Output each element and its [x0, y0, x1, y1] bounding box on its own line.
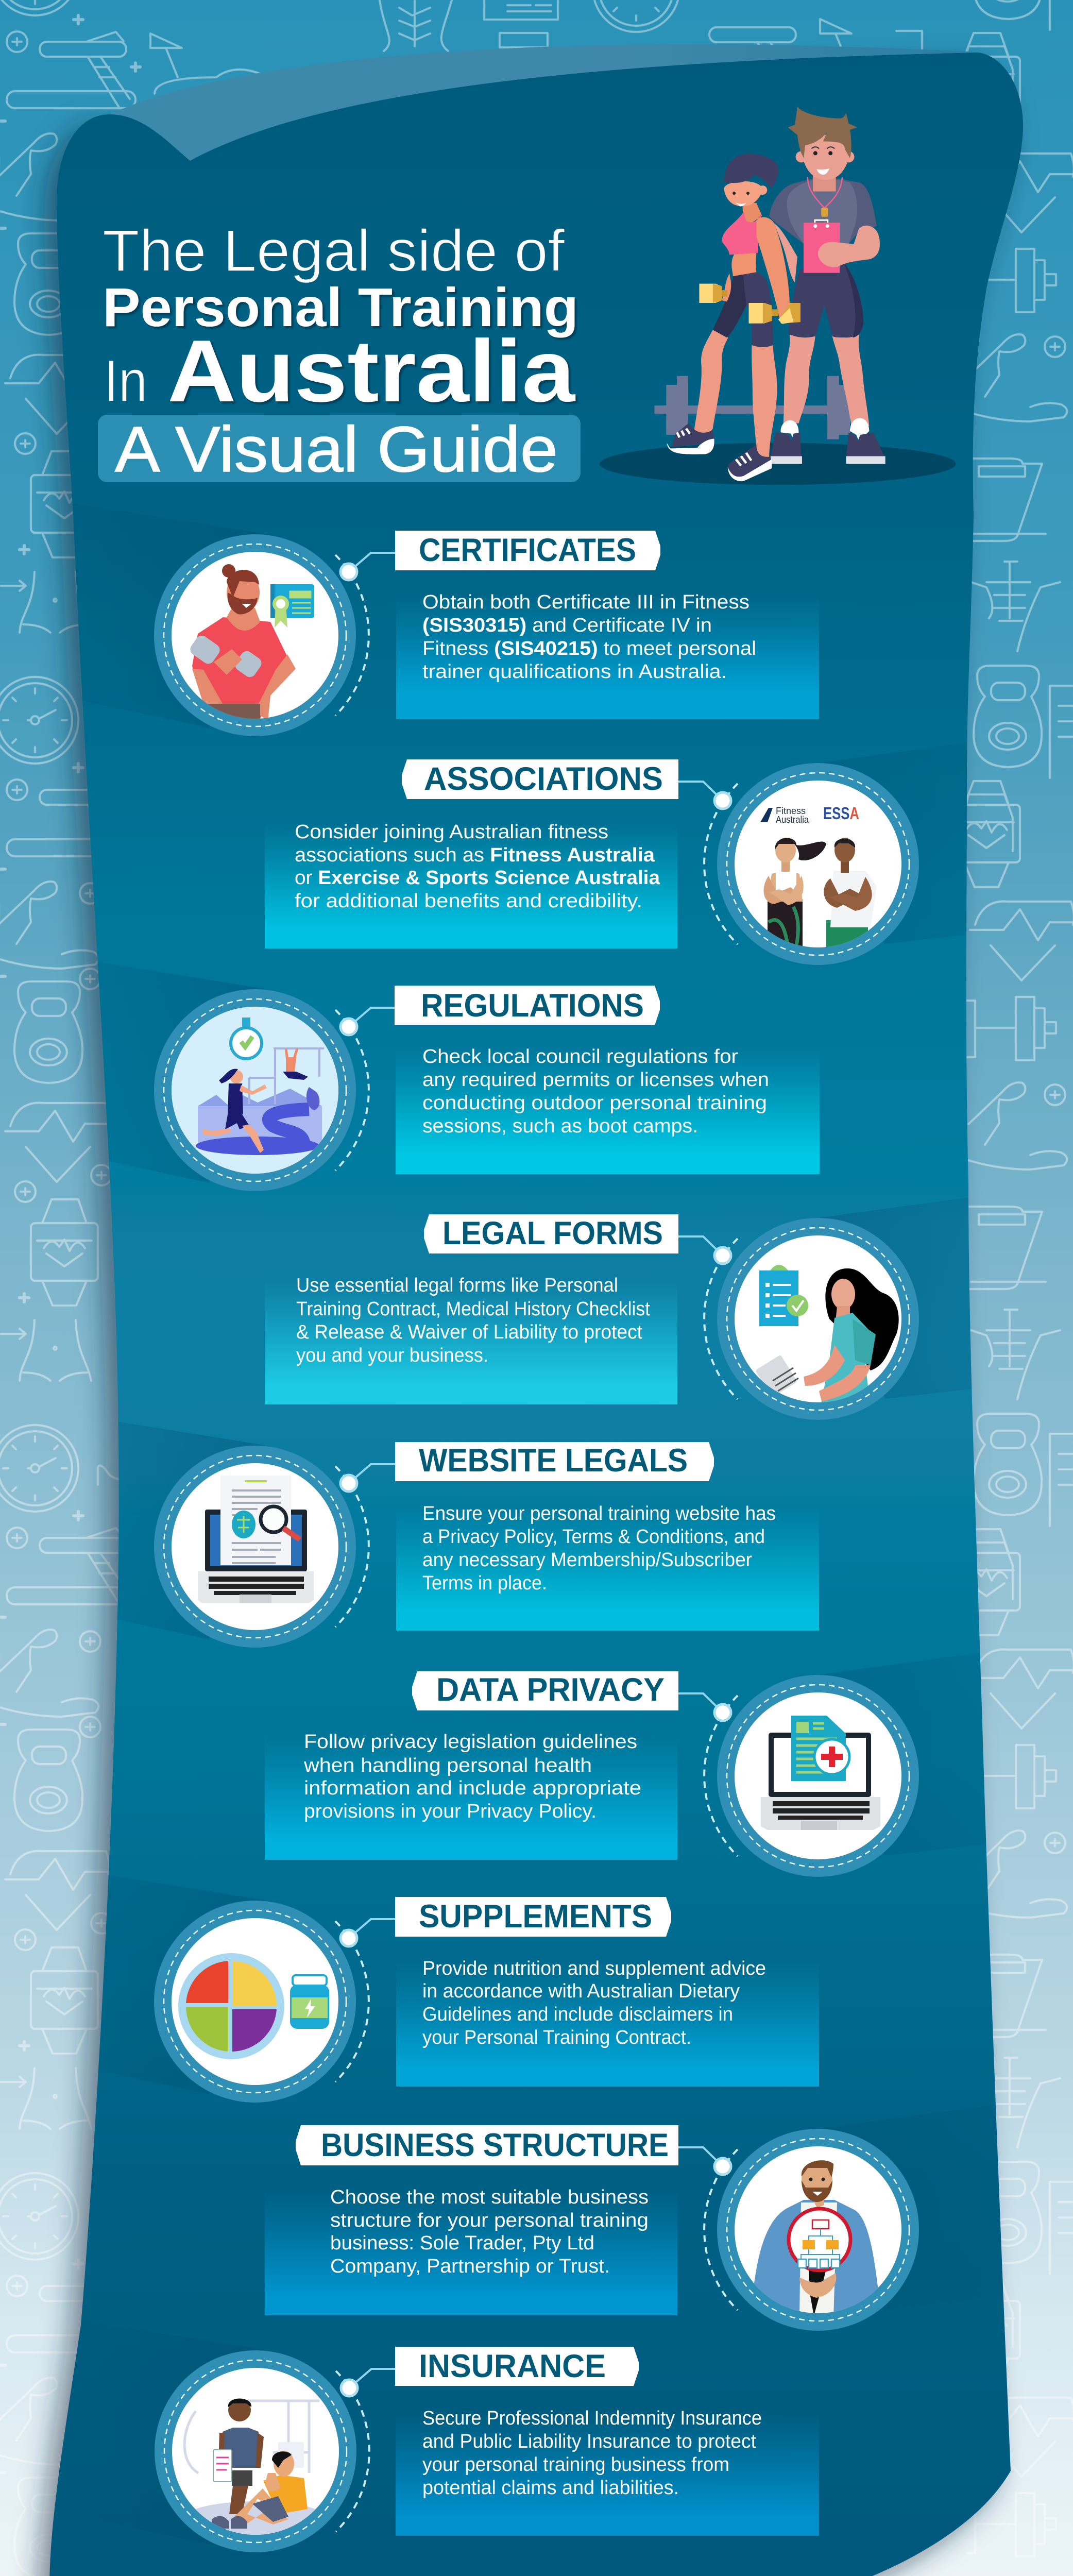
- text panel: [265, 1736, 677, 1860]
- text block: Consider joining Australian fitness: [295, 821, 608, 843]
- panel: regulations: [154, 986, 820, 1191]
- panel: insurance: [155, 2347, 819, 2552]
- text block: Company, Partnership or Trust.: [330, 2256, 610, 2277]
- text block: [295, 821, 660, 912]
- text block: or Exercise & Sports Science Australia: [295, 867, 660, 889]
- title: [98, 218, 581, 485]
- text panel: [396, 2412, 819, 2536]
- panel: certificates: [154, 531, 819, 736]
- text block: Secure Professional Indemnity Insurance: [422, 2408, 762, 2429]
- text block: when handling personal health: [303, 1755, 592, 1776]
- icon: circular badge data privacy: [678, 1675, 919, 1877]
- text block: in accordance with Australian Dietary: [422, 1980, 740, 2002]
- text block: [422, 591, 756, 683]
- text block: [422, 1046, 769, 1137]
- text block: Obtain both Certificate III in Fitness: [422, 591, 750, 613]
- text block: [422, 1503, 776, 1594]
- icon: circular badge associations: [678, 763, 919, 965]
- text block: you and your business.: [296, 1345, 488, 1366]
- text block: [296, 1275, 650, 1366]
- icon: circular badge website legals: [154, 1446, 396, 1648]
- panel: associations: [265, 759, 919, 965]
- panel: data privacy: [265, 1671, 919, 1877]
- text block: (SIS30315) and Certificate IV in: [422, 615, 712, 636]
- heading: WEBSITE LEGALS: [419, 1443, 688, 1479]
- text block: Choose the most suitable business: [330, 2187, 649, 2208]
- text block: business: Sole Trader, Pty Ltd: [330, 2232, 594, 2254]
- text block: for additional benefits and credibility.: [295, 890, 642, 912]
- icon: circular badge certificates: [154, 534, 396, 736]
- text panel: [396, 1506, 819, 1631]
- text block: any necessary Membership/Subscriber: [422, 1549, 752, 1571]
- text block: trainer qualifications in Australia.: [422, 661, 727, 683]
- text block: Guidelines and include disclaimers in: [422, 2004, 733, 2025]
- text block: [422, 2408, 762, 2499]
- text block: structure for your personal training: [330, 2210, 649, 2231]
- heading: SUPPLEMENTS: [419, 1899, 652, 1935]
- icon: circular badge insurance: [155, 2350, 397, 2552]
- heading: REGULATIONS: [421, 988, 644, 1024]
- text block: provisions in your Privacy Policy.: [304, 1801, 597, 1822]
- heading: LEGAL FORMS: [442, 1215, 663, 1251]
- text panel: [396, 1962, 819, 2087]
- heading: BUSINESS STRUCTURE: [321, 2127, 669, 2163]
- panel: business structure: [265, 2125, 919, 2331]
- text panel: [265, 824, 677, 948]
- heading: DATA PRIVACY: [436, 1672, 665, 1708]
- text block: sessions, such as boot camps.: [422, 1115, 698, 1137]
- text block: your Personal Training Contract.: [422, 2027, 691, 2048]
- heading: ASSOCIATIONS: [424, 761, 663, 797]
- panel: legal forms: [265, 1214, 919, 1420]
- text block: a Privacy Policy, Terms & Conditions, and: [422, 1526, 765, 1548]
- text block: Check local council regulations for: [422, 1046, 738, 1067]
- panel: supplements: [154, 1897, 819, 2103]
- text block: information and include appropriate: [304, 1777, 641, 1799]
- illustration: trainers with barbell: [600, 107, 956, 485]
- text block: [303, 1731, 641, 1822]
- text block: your personal training business from: [422, 2454, 729, 2476]
- heading: CERTIFICATES: [419, 532, 636, 568]
- text block: Terms in place.: [422, 1572, 547, 1594]
- text block: and Public Liability Insurance to protect: [422, 2431, 756, 2452]
- icon: circular badge regulations: [154, 989, 396, 1191]
- text block: [422, 1958, 766, 2048]
- title: Australia: [167, 322, 576, 420]
- icon: circular badge supplements: [154, 1901, 396, 2103]
- text panel: [265, 1280, 677, 1404]
- text block: Follow privacy legislation guidelines: [304, 1731, 637, 1753]
- panel: website legals: [154, 1442, 819, 1648]
- text block: any required permits or licenses when: [422, 1069, 769, 1091]
- text panel: [396, 1050, 820, 1174]
- text block: conducting outdoor personal training: [422, 1092, 767, 1114]
- text block: & Release & Waiver of Liability to protect: [296, 1321, 642, 1343]
- title: Personal Training: [103, 277, 578, 338]
- text block: Ensure your personal training website has: [422, 1503, 776, 1524]
- text panel: [265, 2191, 677, 2315]
- title: A Visual Guide: [115, 414, 558, 485]
- text block: associations such as Fitness Australia: [295, 844, 655, 866]
- icon: circular badge business structure: [678, 2129, 919, 2331]
- icon: circular badge associations: Australia: [776, 815, 809, 825]
- text panel: [396, 595, 819, 719]
- text block: Use essential legal forms like Personal: [296, 1275, 618, 1296]
- title: In: [104, 348, 147, 414]
- text block: Training Contract, Medical History Checklist: [296, 1298, 650, 1320]
- icon: circular badge associations: Fitness: [776, 806, 806, 816]
- icon: circular badge legal forms: [678, 1218, 919, 1420]
- text block: Provide nutrition and supplement advice: [422, 1958, 766, 1979]
- text block: Fitness (SIS40215) to meet personal: [422, 638, 756, 659]
- heading: INSURANCE: [419, 2348, 606, 2384]
- text block: [330, 2187, 649, 2277]
- text block: potential claims and liabilities.: [422, 2477, 679, 2499]
- icon: circular badge associations: ESSA: [823, 804, 859, 823]
- title: The Legal side of: [103, 218, 565, 284]
